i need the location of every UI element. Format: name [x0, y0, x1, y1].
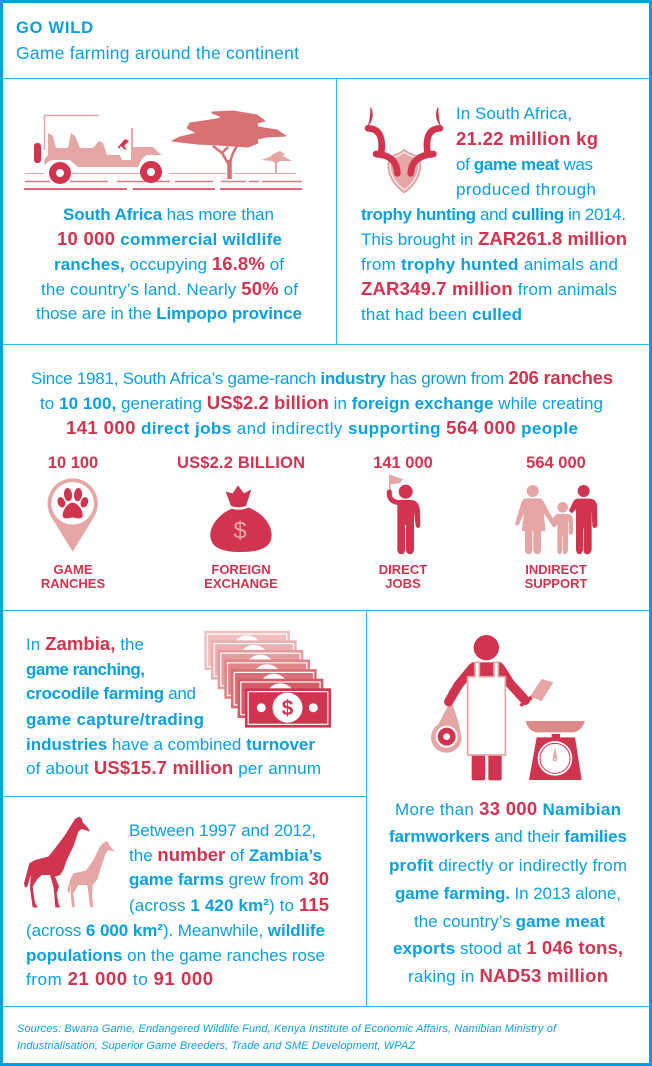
stat: game ranches: RANCHES [41, 576, 105, 591]
text block [389, 798, 627, 986]
stat: indirect support: SUPPORT [525, 576, 587, 591]
stat: game ranches: GAME [54, 562, 93, 577]
stat: indirect support: 564 000 [526, 454, 586, 472]
text block: South Africa has more than [63, 205, 274, 224]
text block: the country’s land. Nearly 50% of [41, 278, 298, 299]
stat: foreign exchange: US$2.2 BILLION [177, 454, 305, 472]
panel: Zambia game farms [24, 817, 329, 989]
text block: produced through [456, 180, 596, 199]
icon: map pin with paw [48, 478, 98, 552]
icon: family [515, 485, 597, 554]
text block: crocodile farming and [26, 684, 196, 703]
text block [31, 367, 613, 438]
text block: that had been culled [361, 305, 522, 324]
icon: stack of banknotes [204, 631, 331, 728]
text block: More than 33 000 Namibian [395, 798, 621, 819]
text block: game farms grew from 30 [129, 868, 329, 889]
stat: indirect support: INDIRECT [525, 562, 587, 577]
icon: butcher with scale [431, 635, 585, 780]
panel: South Africa wildlife ranches [24, 111, 302, 323]
text block: from 21 000 to 91 000 [26, 968, 213, 989]
stat: direct jobs: 141 000 [373, 454, 433, 472]
text block: Since 1981, South Africa’s game-ranch industry has grown from 206 ranches [31, 367, 613, 388]
icon: money bag: $ [233, 518, 247, 545]
icon: giraffes [24, 817, 114, 908]
sources: Industrialisation, Superior Game Breeders, Trade and SME Development, WPAZ [17, 1040, 416, 1052]
panel: game-ranch industry growth [31, 367, 613, 591]
stat: game ranches: 10 100 [48, 454, 98, 472]
text block: (across 1 420 km²) to 115 [129, 894, 329, 915]
text block: ZAR349.7 million from animals [361, 278, 617, 299]
title block [16, 19, 299, 63]
heading: GO WILD [16, 19, 93, 37]
text block: This brought in ZAR261.8 million [361, 228, 627, 249]
text block: (across 6 000 km²). Meanwhile, wildlife [26, 921, 325, 940]
stat: foreign exchange [177, 454, 305, 591]
text block: 21.22 million kg [456, 128, 598, 149]
text block: profit directly or indirectly from [389, 856, 627, 875]
text block: In South Africa, [456, 104, 572, 123]
text block [26, 821, 329, 989]
text block: game ranching, [26, 660, 145, 679]
text block: of game meat was [456, 155, 593, 174]
panel: Namibia game farming [389, 635, 627, 986]
icon: trophy antlers on shield [368, 107, 440, 194]
text block: In Zambia, the [26, 633, 144, 654]
subtitle: Game farming around the continent [16, 43, 299, 63]
stat: game ranches [41, 454, 105, 591]
panel: South Africa game meat [361, 104, 627, 324]
text block: from trophy hunted animals and [361, 255, 618, 274]
text block: populations on the game ranches rose [26, 946, 325, 965]
text block: trophy hunting and culling in 2014. [361, 205, 626, 224]
text block: farmworkers and their families [389, 827, 627, 846]
stat: indirect support [515, 454, 597, 591]
stat: foreign exchange: EXCHANGE [204, 576, 278, 591]
text block: of about US$15.7 million per annum [26, 757, 321, 778]
text block: the number of Zambia’s [129, 844, 322, 865]
sources: Sources: Bwana Game, Endangered Wildlife Fund, Kenya Institute of Economic Affairs, Namibian Ministry of [17, 1023, 557, 1035]
text block [36, 205, 302, 323]
text block: the country’s game meat [414, 912, 605, 931]
text block: game farming. In 2013 alone, [395, 884, 621, 903]
text block: ranches, occupying 16.8% of [54, 253, 284, 274]
text block: Between 1997 and 2012, [129, 821, 316, 840]
panel: Zambia industries [26, 631, 331, 778]
icon: stack of banknotes: $ [282, 697, 294, 720]
stat: direct jobs: DIRECT [379, 562, 427, 577]
icon: person with flag [389, 474, 420, 554]
stat: foreign exchange: FOREIGN [211, 562, 271, 577]
sources [17, 1023, 557, 1052]
text block: raking in NAD53 million [408, 965, 608, 986]
text block: game capture/trading [26, 710, 204, 729]
illustration: safari jeep and acacia trees [24, 111, 302, 189]
text block: to 10 100, generating US$2.2 billion in foreign exchange while creating [40, 392, 603, 413]
text block: those are in the Limpopo province [36, 304, 302, 323]
text block: 10 000 commercial wildlife [57, 228, 282, 249]
stat: direct jobs: JOBS [385, 576, 421, 591]
text block [361, 104, 627, 324]
stat: direct jobs [373, 454, 433, 591]
text block: 141 000 direct jobs and indirectly supporting 564 000 people [66, 417, 578, 438]
text block: industries have a combined turnover [26, 735, 315, 754]
text block [26, 633, 321, 778]
text block: exports stood at 1 046 tons, [393, 937, 623, 958]
